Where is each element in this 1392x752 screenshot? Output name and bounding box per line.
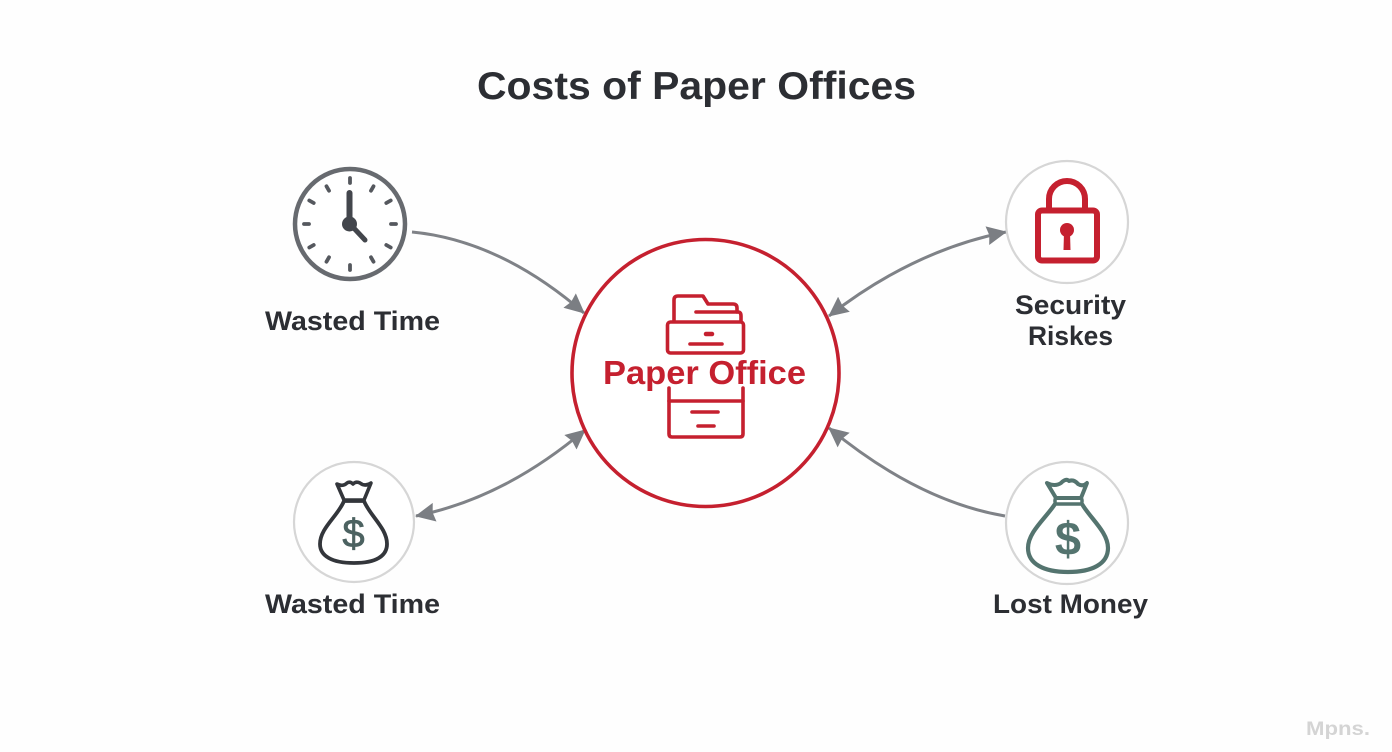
label: Security xyxy=(1015,290,1126,320)
icon: dark money bag in circle: $ xyxy=(342,512,365,556)
hub label: Paper Office xyxy=(603,354,806,391)
arrow: lost money to paper office xyxy=(829,428,1005,516)
icon: lower filing drawer xyxy=(669,388,743,437)
panel: central paper office hub xyxy=(572,240,839,506)
label: Lost Money xyxy=(993,589,1148,619)
panel: wasted time clock xyxy=(265,169,440,336)
label xyxy=(1015,290,1126,351)
watermark: Mpns. xyxy=(1306,719,1370,740)
icon: teal money bag in circle xyxy=(1006,462,1128,584)
label: Wasted Time xyxy=(265,589,440,619)
title: Costs of Paper Offices xyxy=(477,65,916,108)
icon: clock xyxy=(295,169,405,279)
panel: lost money xyxy=(993,462,1148,619)
label: Wasted Time xyxy=(265,306,440,336)
panel: security risks xyxy=(1006,161,1128,351)
arrow: security risks and paper office xyxy=(829,232,1006,316)
icon: upper filing drawer with folder xyxy=(668,296,744,353)
label: Riskes xyxy=(1028,321,1113,351)
panel: wasted time money bag xyxy=(265,462,440,619)
icon: padlock in circle xyxy=(1006,161,1128,283)
icon: dark money bag in circle xyxy=(294,462,414,582)
arrow: wasted time clock to paper office xyxy=(412,232,584,313)
arrow: wasted time money bag and paper office xyxy=(416,430,585,516)
icon: teal money bag in circle: $ xyxy=(1055,512,1081,565)
